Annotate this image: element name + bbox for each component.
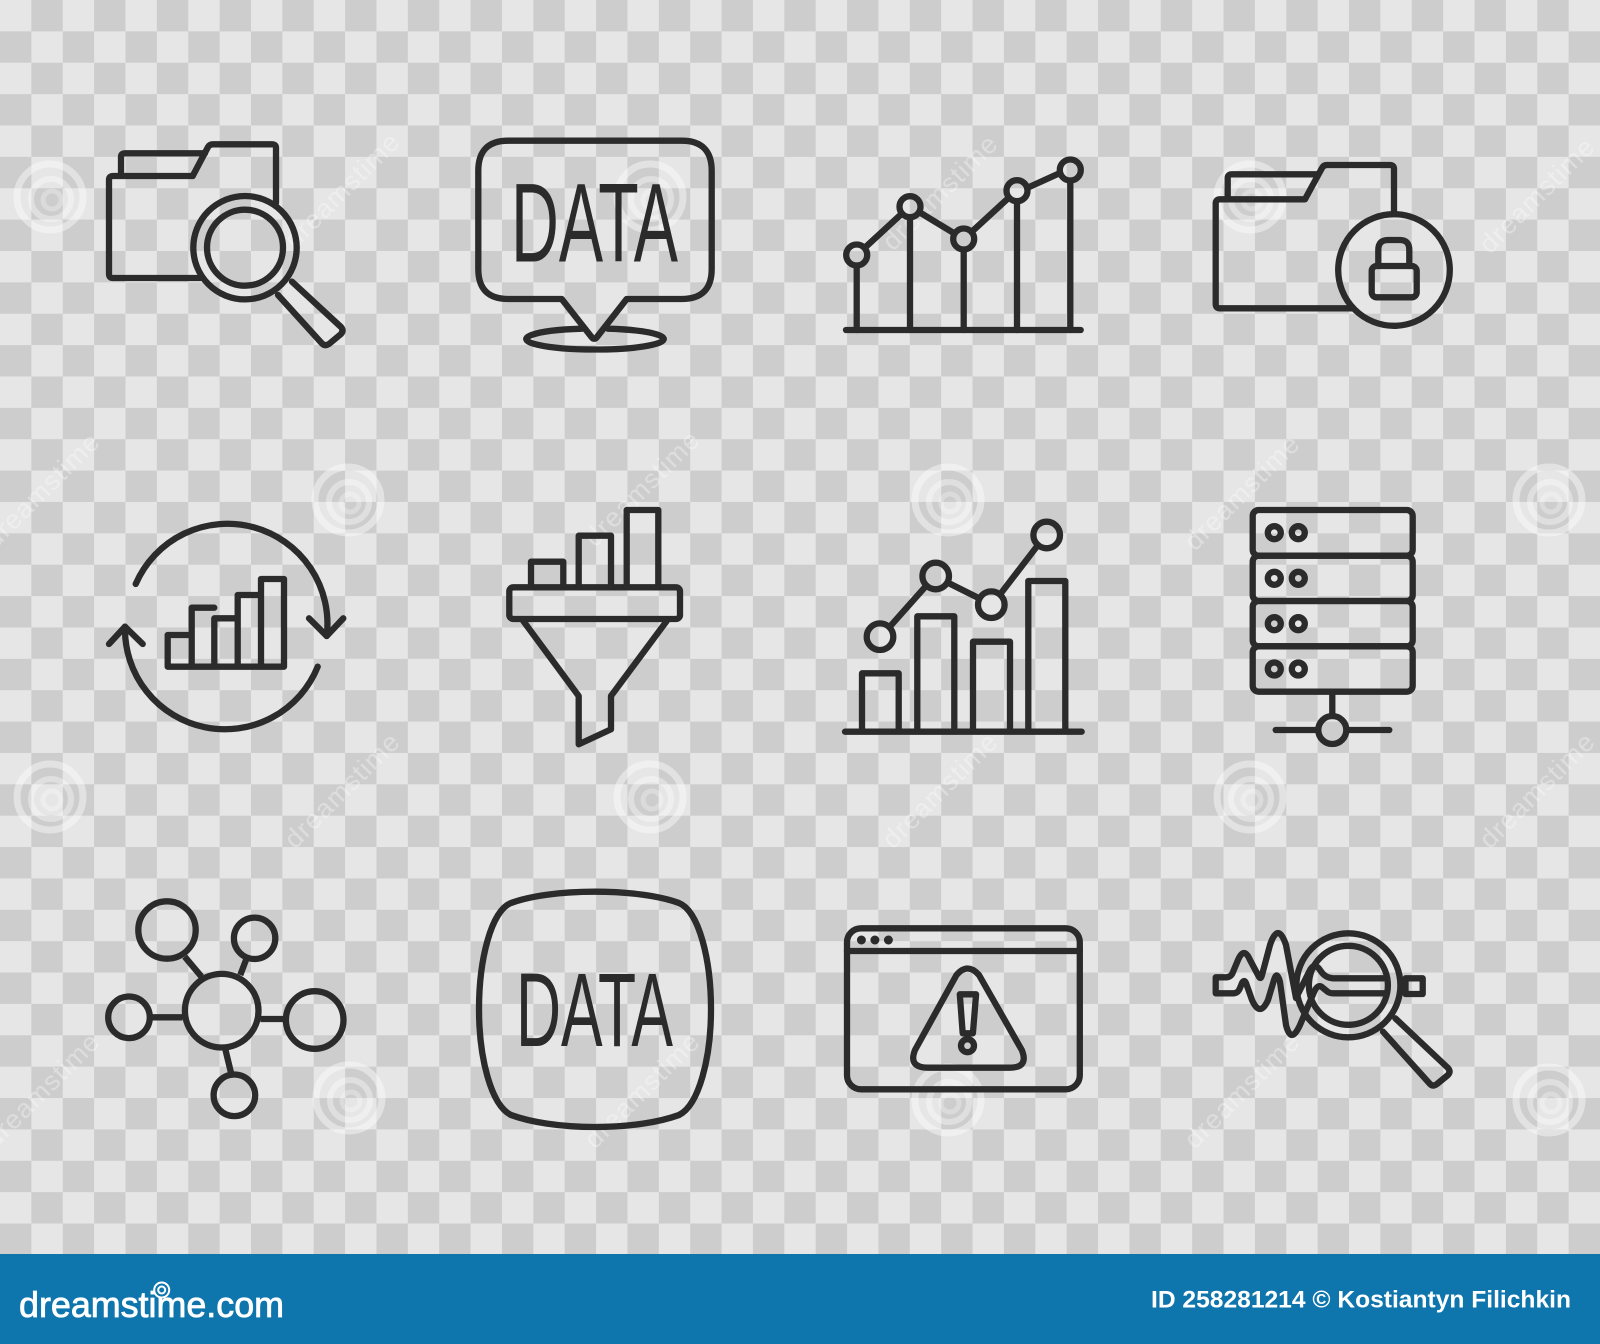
watermark spirals (17, 164, 1582, 1133)
watermark diagonal text: dreamstime (578, 1026, 706, 1154)
icon: line chart with stems (846, 160, 1081, 330)
watermark diagonal text: dreamstime (1178, 428, 1306, 556)
brand logo spiral (154, 1282, 169, 1298)
image ID and author credit: ID 258281214 © Kostiantyn Filichkin (1151, 1287, 1571, 1314)
brand logo text: dreamstime.com (19, 1284, 284, 1325)
watermark diagonal text (0, 126, 1600, 1154)
watermark diagonal text: dreamstime (1473, 131, 1600, 259)
icon: funnel with bars (509, 510, 680, 744)
footer bar (0, 1254, 1600, 1344)
icon: folder with magnifying glass (109, 144, 342, 345)
watermark diagonal text: dreamstime (1473, 726, 1600, 854)
icon: browser window warning (847, 928, 1080, 1089)
watermark diagonal text: dreamstime (278, 726, 406, 854)
icon: bar chart with refresh arrows (109, 524, 343, 729)
icon: DATA squircle badge (479, 892, 711, 1127)
icon: server rack network (1253, 510, 1413, 744)
watermark diagonal text: dreamstime (578, 424, 706, 552)
icon: bar and line chart (845, 522, 1082, 732)
icon: pulse under magnifying glass (1216, 933, 1450, 1086)
watermark diagonal text: dreamstime (876, 726, 1004, 854)
label: DATA: DATA (516, 952, 673, 1069)
label: DATA: DATA (511, 161, 678, 286)
watermark diagonal text: dreamstime (876, 128, 1004, 256)
icon set (108, 141, 1450, 1127)
watermark diagonal text: dreamstime (278, 126, 406, 254)
icon: DATA speech bubble pin (478, 141, 712, 350)
icon: folder with padlock (1216, 165, 1450, 326)
watermark diagonal text: dreamstime (1178, 1026, 1306, 1154)
icon: network hub nodes (108, 901, 344, 1116)
